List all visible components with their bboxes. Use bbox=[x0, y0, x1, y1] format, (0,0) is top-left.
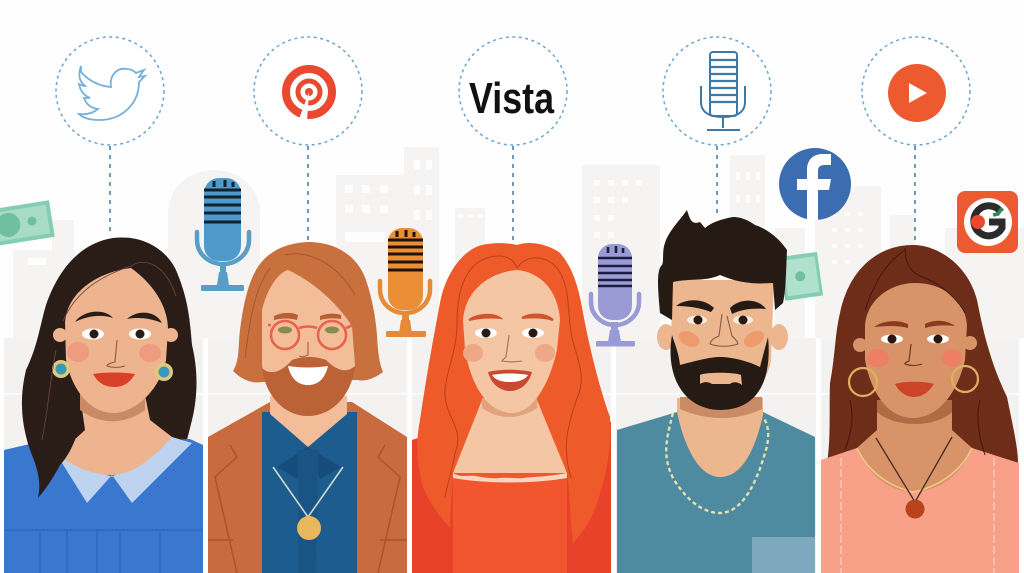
icon: play button bbox=[862, 37, 970, 145]
icon: target bbox=[254, 37, 362, 145]
icon: microphone outline bbox=[663, 37, 771, 145]
icon: orange app logo bbox=[957, 191, 1018, 253]
background: city skyline bbox=[0, 147, 1024, 573]
person: woman with auburn hair, peach top bbox=[821, 245, 1019, 573]
dashed connector lines bbox=[110, 146, 915, 246]
person: woman with red wavy hair bbox=[412, 243, 611, 573]
icon: Vista logo: Vista bbox=[469, 74, 554, 123]
icon: purple microphone bbox=[591, 244, 639, 346]
person: woman with dark hair, blue dress bbox=[4, 237, 203, 573]
icon: banknote right bbox=[779, 252, 823, 301]
icon: Vista logo bbox=[459, 37, 567, 145]
icon: twitter bird bbox=[56, 37, 164, 145]
icon: blue microphone bbox=[197, 178, 249, 291]
icon: banknote left bbox=[0, 200, 55, 247]
icon: orange microphone bbox=[380, 228, 430, 337]
icon: facebook bbox=[779, 148, 851, 220]
person: bearded man with glasses, brown jacket bbox=[208, 242, 407, 573]
person: man with dark hair and beard, teal shirt bbox=[617, 210, 815, 573]
